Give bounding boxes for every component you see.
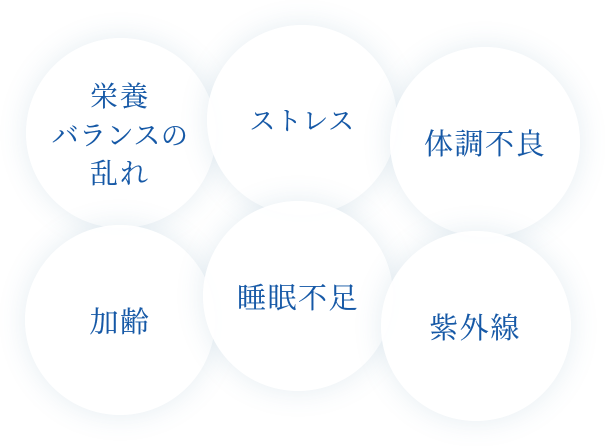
circle: poor health bbox=[390, 47, 580, 237]
circle: ultraviolet rays bbox=[381, 231, 571, 421]
label: ultraviolet rays: 紫外線 bbox=[429, 312, 521, 344]
label: stress: ストレス bbox=[249, 106, 355, 136]
label: poor health: 体調不良 bbox=[424, 128, 546, 160]
circle: aging bbox=[25, 225, 215, 415]
label: nutrition imbalance: 栄養 bbox=[90, 82, 150, 112]
circle: lack of sleep bbox=[203, 201, 393, 391]
label: aging: 加齢 bbox=[89, 306, 150, 338]
label: nutrition imbalance: 乱れ bbox=[90, 158, 150, 190]
label: lack of sleep: 睡眠不足 bbox=[237, 282, 359, 314]
label: nutrition imbalance: バランスの bbox=[52, 120, 188, 150]
circle: nutrition imbalance bbox=[26, 38, 216, 228]
circle: stress bbox=[207, 25, 397, 215]
label: nutrition imbalance bbox=[52, 82, 188, 190]
